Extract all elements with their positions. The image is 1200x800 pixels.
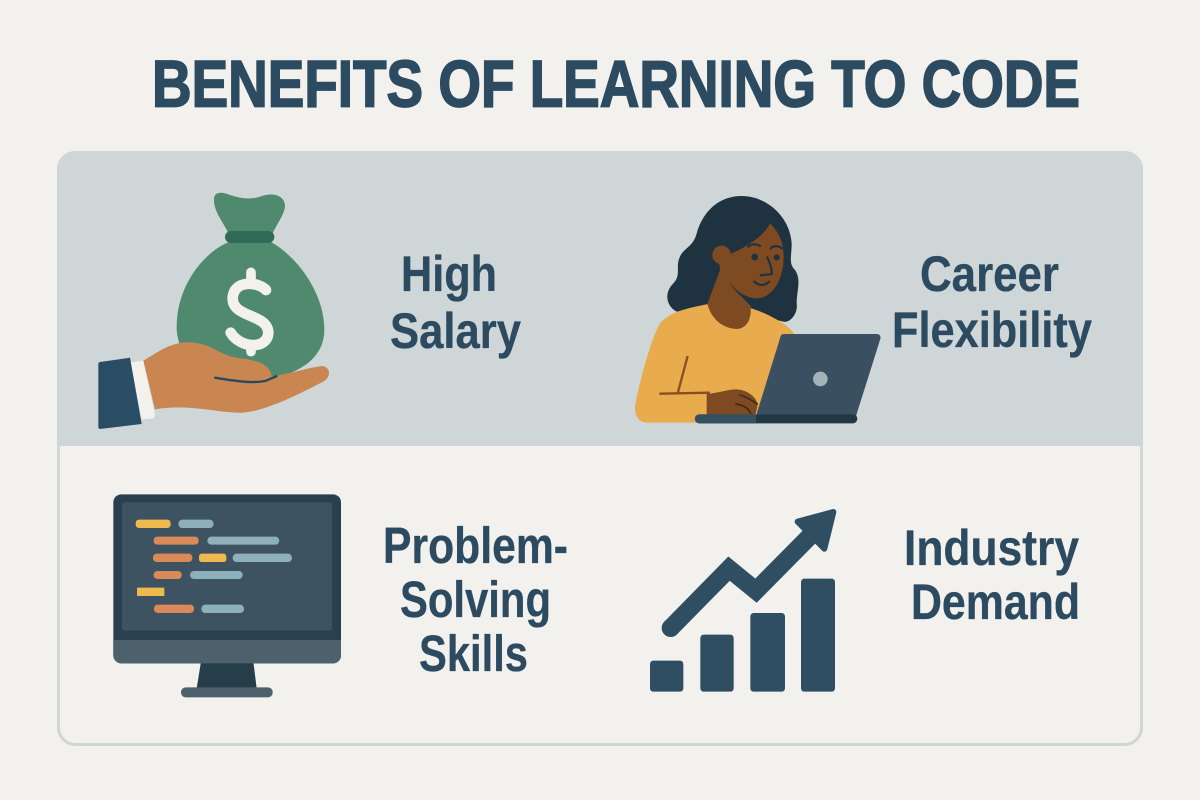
label: problem-solving skills xyxy=(383,517,568,682)
label: industry demand: Demand xyxy=(911,574,1080,630)
label: high salary: High xyxy=(401,246,497,302)
face and neck xyxy=(707,223,784,329)
sweater xyxy=(635,304,794,423)
label: high salary xyxy=(390,246,521,359)
icon: computer monitor with code xyxy=(113,494,341,697)
hair xyxy=(667,196,798,322)
label: career flexibility: Flexibility xyxy=(892,302,1092,358)
monitor stand xyxy=(181,662,273,697)
label: industry demand xyxy=(904,520,1080,630)
label: problem-solving skills: Problem- xyxy=(383,517,568,574)
monitor body xyxy=(113,494,341,663)
label: high salary: Salary xyxy=(390,303,521,359)
code lines xyxy=(136,520,292,613)
label: problem-solving skills: Solving xyxy=(400,571,551,628)
arrow xyxy=(662,512,833,637)
money bag xyxy=(177,193,324,377)
label: industry demand: Industry xyxy=(904,520,1079,576)
arm and hand xyxy=(659,356,757,417)
hand xyxy=(98,342,329,429)
icon: hand holding money bag xyxy=(98,193,329,429)
label: career flexibility: Career xyxy=(920,246,1059,302)
label: problem-solving skills: Skills xyxy=(419,625,528,682)
label: career flexibility xyxy=(892,246,1092,358)
icon: rising bar chart with arrow xyxy=(650,512,835,692)
panel: benefits card xyxy=(57,151,1143,744)
icon: woman at laptop xyxy=(635,196,881,423)
laptop xyxy=(695,334,881,423)
panel: top row background xyxy=(57,151,1143,446)
panel: bottom row background xyxy=(58,152,1142,744)
bars xyxy=(650,579,835,692)
